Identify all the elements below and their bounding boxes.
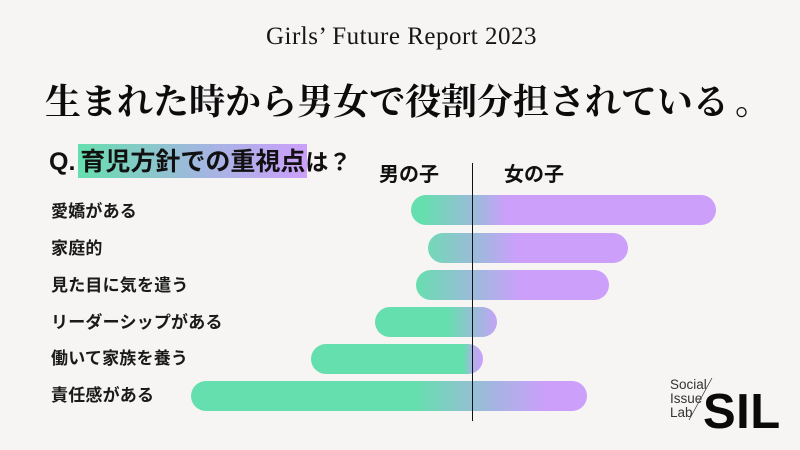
logo small text: Issue (670, 391, 702, 406)
question highlight (78, 144, 307, 178)
logo small text (670, 377, 707, 420)
question text: Q.育児方針での重視点は？ (49, 148, 351, 176)
bar: appearance (416, 270, 609, 300)
row label: domestic: 家庭的 (51, 239, 103, 258)
bar: breadwinner (311, 344, 483, 374)
logo: Social Issue Lab SIL (670, 377, 781, 439)
main headline: 生まれた時から男女で役割分担されている。 (45, 74, 771, 125)
logo small text: Social (670, 377, 707, 392)
row label: breadwinner: 働いて家族を養う (51, 349, 188, 368)
question heading (49, 144, 351, 178)
report title: Girls’ Future Report 2023 (266, 23, 537, 50)
logo small text: Lab (670, 405, 693, 420)
column label: boys: 男の子 (379, 164, 439, 186)
row label: affection: 愛嬌がある (51, 202, 137, 221)
row label: leadership: リーダーシップがある (51, 313, 223, 332)
bar: leadership (375, 307, 497, 337)
row label: responsibility: 責任感がある (51, 386, 154, 405)
bar: affection (411, 195, 716, 225)
center axis line (472, 163, 473, 421)
bar: domestic (428, 233, 628, 263)
logo slash (688, 378, 712, 420)
column label: girls: 女の子 (504, 164, 564, 186)
row label: appearance: 見た目に気を遣う (51, 276, 189, 295)
bar: responsibility (191, 381, 587, 411)
logo large text: SIL (703, 385, 781, 439)
